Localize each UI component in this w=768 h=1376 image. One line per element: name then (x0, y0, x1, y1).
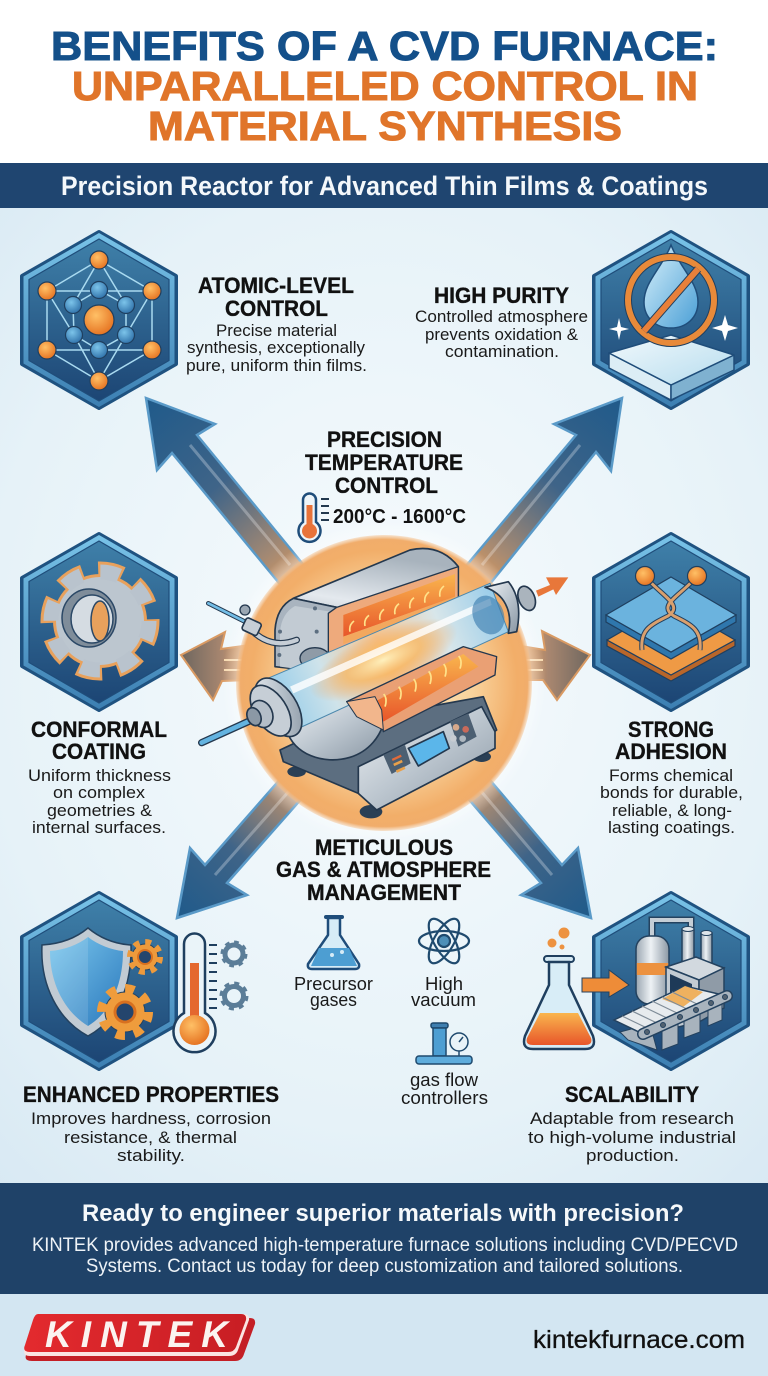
text: gas and atmosphere management heading: GAS & ATMOSPHERE (276, 857, 491, 882)
text: atomic-level control: ATOMIC-LEVEL (198, 273, 354, 298)
icon: lab flask with arrow (524, 928, 629, 1049)
text: scalability (528, 1082, 736, 1165)
icon: precursor gases flask (308, 915, 359, 969)
title: MATERIAL SYNTHESIS (148, 103, 622, 149)
icon: scalability factory (594, 893, 748, 1069)
text: strong adhesion: STRONG (628, 717, 714, 742)
text: high purity: prevents oxidation & (425, 325, 579, 344)
icon: thermometer small (298, 494, 329, 542)
text: atomic-level control: pure, uniform thin films. (186, 356, 367, 375)
icon: enhanced properties (22, 893, 176, 1069)
icon: strong adhesion (594, 534, 748, 710)
text: conformal coating: CONFORMAL (31, 717, 167, 742)
call to action panel: KINTEK provides advanced high-temperature furnace solutions including CVD/PECVD (32, 1235, 738, 1256)
arrow: to high purity (450, 398, 622, 605)
text: strong adhesion (600, 717, 743, 837)
label: high vacuum: High (425, 974, 463, 994)
icon: atomic-level control (22, 232, 176, 408)
text: high purity: Controlled atmosphere (415, 307, 588, 326)
logo: kintek (24, 1314, 255, 1361)
text: conformal coating (28, 717, 171, 837)
text: high purity: HIGH PURITY (434, 283, 569, 308)
label: precursor gases: Precursor (294, 974, 373, 994)
icon: high purity (594, 232, 748, 408)
text: atomic-level control: Precise material (216, 321, 337, 340)
text: conformal coating: Uniform thickness (28, 766, 171, 785)
text: conformal coating: COATING (52, 739, 146, 764)
text: high purity (415, 283, 588, 361)
text: scalability: Adaptable from research (530, 1109, 734, 1128)
text: precision temperature control: TEMPERATURE (305, 450, 463, 475)
text: atomic-level control: synthesis, exceptionally (187, 338, 365, 357)
furnace feet (287, 751, 491, 818)
label: high vacuum (411, 974, 476, 1010)
left tube cap and rod (202, 670, 311, 745)
call to action panel: Ready to engineer superior materials with precision? (82, 1200, 684, 1227)
text: strong adhesion: lasting coatings. (608, 818, 735, 837)
control panel (358, 707, 495, 810)
arrow: to conformal coating (181, 632, 250, 700)
text: scalability: production. (586, 1146, 679, 1165)
text: scalability: SCALABILITY (565, 1082, 699, 1107)
arrow: to atomic-level control (146, 398, 320, 605)
icon: conformal coating gear (22, 534, 176, 710)
text: gas and atmosphere management heading: METICULOUS (315, 835, 453, 860)
title: UNPARALLELED CONTROL IN (72, 63, 698, 109)
subtitle band (0, 163, 768, 208)
lower heating window (347, 647, 497, 732)
icon: gas flow controller (416, 1023, 472, 1064)
glass tube (260, 583, 510, 730)
label: precursor gases: gases (310, 990, 357, 1010)
text: enhanced properties: stability. (117, 1146, 185, 1165)
label: precursor gases (294, 974, 373, 1010)
upper housing (275, 549, 458, 673)
label: gas flow controllers: controllers (401, 1088, 488, 1108)
lower half chamber (287, 700, 385, 760)
call to action panel (0, 1183, 768, 1294)
title (51, 23, 718, 149)
text: enhanced properties: resistance, & thermal (64, 1128, 237, 1147)
text: atomic-level control: CONTROL (225, 296, 328, 321)
subtitle band: Precision Reactor for Advanced Thin Films & Coatings (61, 171, 708, 201)
label: high vacuum: vacuum (411, 990, 476, 1010)
text: precision temperature control: 200°C - 1600°C (333, 506, 466, 528)
text: enhanced properties: Improves hardness, corrosion (31, 1109, 271, 1128)
website url: kintekfurnace.com (533, 1326, 745, 1354)
text: strong adhesion: bonds for durable, (600, 783, 743, 802)
text: gas and atmosphere management heading (276, 835, 491, 905)
text: enhanced properties (23, 1082, 279, 1165)
text: precision temperature control: CONTROL (335, 473, 438, 498)
text: gas and atmosphere management heading: MANAGEMENT (307, 880, 462, 905)
gas inlet pipe (208, 603, 297, 643)
text: scalability: to high-volume industrial (528, 1128, 736, 1147)
call to action panel: Systems. Contact us today for deep customization and tailored solutions. (86, 1256, 683, 1277)
text: conformal coating: on complex (53, 783, 146, 802)
center furnace illustration (202, 521, 568, 845)
arrow: to scalability (452, 760, 591, 918)
label: gas flow controllers (401, 1070, 488, 1108)
logo: kintek: KINTEK (45, 1314, 230, 1355)
text: atomic-level control (186, 273, 367, 375)
text: strong adhesion: reliable, & long- (612, 801, 732, 820)
arrow: to enhanced properties (177, 760, 318, 918)
text: strong adhesion: Forms chemical (609, 766, 733, 785)
right tube cap (485, 582, 539, 633)
arrow: to strong adhesion (515, 631, 590, 700)
text: conformal coating: geometries & (47, 801, 153, 820)
outlet arrow (536, 577, 568, 597)
text: precision temperature control (305, 427, 466, 528)
label: gas flow controllers: gas flow (410, 1070, 479, 1090)
text: high purity: contamination. (445, 342, 559, 361)
furnace base (280, 697, 497, 808)
footer strip (0, 1294, 768, 1376)
text: conformal coating: internal surfaces. (32, 818, 166, 837)
text: precision temperature control: PRECISION (327, 427, 442, 452)
header panel (0, 0, 768, 163)
icon: high vacuum atom (419, 914, 469, 968)
title: BENEFITS OF A CVD FURNACE: (51, 23, 718, 69)
icon: thermometer and gears (174, 934, 246, 1052)
text: enhanced properties: ENHANCED PROPERTIES (23, 1082, 279, 1107)
text: strong adhesion: ADHESION (615, 739, 727, 764)
